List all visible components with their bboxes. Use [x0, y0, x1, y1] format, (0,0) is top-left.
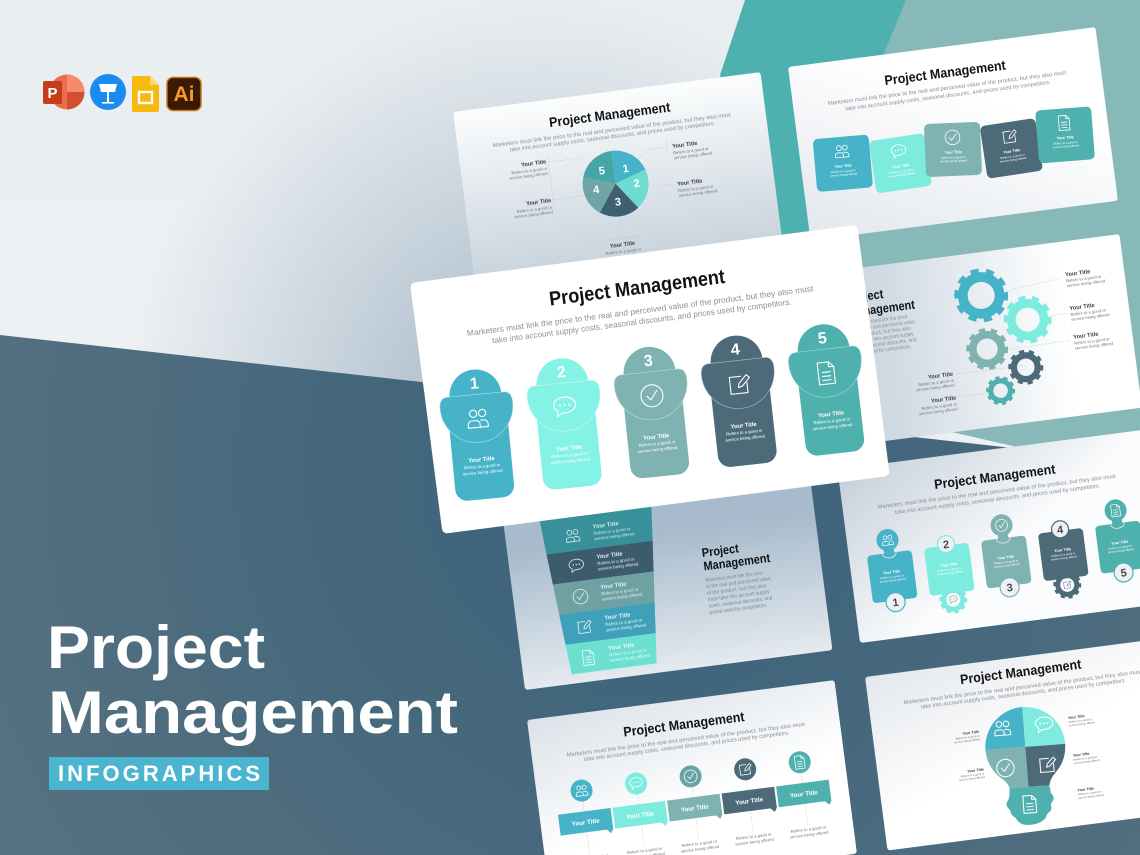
heading: [701, 537, 772, 573]
column 5: 5: [817, 330, 828, 348]
block 5: Your Title: [1057, 135, 1074, 141]
column 1: Your Title: [468, 456, 496, 464]
label: right top: [1068, 713, 1095, 728]
paragraph: must take into account supply: [852, 331, 914, 345]
ribbon 4: [717, 755, 781, 848]
funnel band 2: Refers to a good or: [597, 556, 635, 566]
block 1: [813, 134, 873, 192]
subtitle: Marketers must link the price to the real and perceived value of the product, but they also must: [492, 112, 732, 149]
pie chart: 5: [598, 165, 606, 178]
subtitle: Marketers must link the price to the real and perceived value of the product, but they also must: [466, 284, 814, 338]
paragraph: Marketers must link the price: [705, 570, 763, 584]
card 2: Refers to a good or: [937, 566, 961, 573]
funnel band 3: Refers to a good or: [601, 587, 639, 596]
block 2: service being offered: [888, 171, 916, 179]
label: gear 4: service being offered: [916, 383, 955, 393]
label: gear 5: Refers to a good or: [921, 401, 958, 411]
column 3: service being offered: [638, 445, 678, 454]
label: middle left: [512, 198, 554, 219]
card 1: [864, 526, 919, 614]
block 3: Refers to a good or: [941, 155, 966, 160]
column 4: Refers to a good or: [726, 428, 764, 437]
label: left middle: Your Title: [967, 767, 984, 774]
block 5: Refers to a good or: [1053, 140, 1078, 146]
paragraph: to the real and perceived value: [706, 576, 771, 590]
paragraph: prices used by competitors.: [853, 344, 912, 357]
paragraph: costs, seasonal discounts, and: [853, 337, 917, 351]
gear 3: [966, 328, 1008, 370]
card 3: Your Title: [997, 554, 1015, 561]
subtitle: take into account supply costs, seasonal discounts, and prices used by competitors.: [584, 730, 790, 763]
subtitle: take into account supply costs, seasonal discounts, and prices used by competitors.: [510, 121, 716, 153]
label: right bottom: [1077, 785, 1105, 800]
label: top right: Refers to a good or: [673, 146, 710, 155]
label: gear 2: Your Title: [1069, 303, 1095, 312]
funnel band 2: [547, 541, 657, 585]
column 4: [697, 332, 784, 469]
label: gear 2: Refers to a good or: [1070, 307, 1107, 317]
label: bottom: [603, 240, 644, 261]
ribbon 2: Refers to a good or: [627, 846, 663, 855]
pie chart: 3: [614, 196, 622, 209]
subtitle: Marketers must link the price to the real and perceived value of the product, but they also must: [877, 474, 1117, 511]
paragraph: prices used by competitors.: [709, 603, 768, 616]
bulb diagram: [982, 704, 1071, 828]
label: right bottom: service being offered: [1078, 793, 1105, 800]
funnel band 5: service being offered: [610, 653, 651, 663]
heading: Project Management: [622, 709, 746, 740]
column 2: Your Title: [556, 445, 583, 453]
label: bottom: Your Title: [610, 241, 635, 250]
connector lines: [946, 278, 1076, 397]
gear 2: [1003, 295, 1052, 344]
block 3: [924, 122, 982, 177]
heading: Management: [847, 297, 916, 320]
panel: pie chart slide: [453, 72, 783, 286]
funnel band 1: Your Title: [592, 521, 620, 530]
card 4: 4: [1056, 524, 1065, 537]
label: right middle: Your Title: [1073, 752, 1090, 758]
paragraph: [705, 570, 775, 616]
ribbon 4: service being offered: [735, 837, 775, 847]
block 1: Your Title: [834, 163, 852, 169]
ribbon 3: [663, 762, 727, 855]
block 1: service being offered: [830, 172, 858, 178]
block 2: Your Title: [892, 163, 910, 170]
paragraph: to the real and perceived value: [850, 319, 915, 333]
gear 1: [954, 268, 1008, 323]
label: top left: [507, 159, 549, 181]
column 3: Your Title: [643, 433, 670, 442]
funnel band 4: [559, 602, 659, 645]
label: gear 4: Refers to a good or: [918, 378, 955, 387]
column 1: Refers to a good or: [464, 462, 501, 470]
label: top left: Refers to a good or: [511, 166, 548, 175]
label: gear 5: service being offered: [919, 406, 959, 416]
funnel band 1: [540, 505, 656, 555]
column 1: 1: [469, 375, 480, 393]
connector lines: [583, 773, 811, 855]
panel: light bulb slide: [865, 637, 1140, 851]
paragraph: must take into account supply: [708, 589, 770, 603]
card 5: 5: [1120, 567, 1128, 580]
funnel band 3: Your Title: [600, 582, 628, 591]
label: left middle: Refers to a good or: [960, 771, 985, 778]
label: top left: Your Title: [521, 159, 547, 169]
label: gear 3: Refers to a good or: [1074, 336, 1111, 346]
pie chart: 2: [633, 178, 641, 190]
label: middle left: service being offered: [514, 209, 554, 219]
funnel band 1: Refers to a good or: [593, 526, 632, 536]
label: middle right: service being offered: [678, 188, 718, 198]
paragraph: costs, seasonal discounts, and: [708, 595, 773, 610]
label: gear 5: [917, 395, 959, 416]
label: gear 2: [1069, 301, 1110, 322]
badge: infographics: INFOGRAPHICS: [58, 761, 260, 786]
label: gear 4: Your Title: [928, 372, 954, 381]
panel: gears slide: [812, 234, 1140, 448]
label: gear 5: Your Title: [931, 395, 957, 405]
heading: Project Management: [884, 57, 1007, 88]
card 3: Refers to a good or: [994, 558, 1019, 566]
label: middle right: Your Title: [677, 178, 703, 188]
label: right top: service being offered: [1069, 720, 1095, 728]
pie chart: 1: [622, 163, 630, 176]
funnel band 5: Refers to a good or: [609, 648, 647, 657]
label: gear 1: [1065, 267, 1106, 288]
column 3: [611, 343, 697, 480]
block 4: [980, 118, 1043, 179]
panel: funnel slide: [502, 477, 832, 690]
label: left middle: service being offered: [959, 775, 986, 782]
card 1: service being offered: [880, 577, 906, 584]
funnel band 5: [566, 633, 660, 675]
subtitle: take into account supply costs, seasonal discounts, and prices used by competitors.: [492, 298, 792, 345]
block 2: Refers to a good or: [889, 167, 914, 175]
funnel band 2: service being offered: [598, 561, 639, 572]
ribbon 3: service being offered: [680, 844, 720, 854]
label: right middle: [1073, 751, 1100, 765]
label: left middle: [958, 767, 986, 782]
column 2: 2: [556, 364, 567, 382]
heading: Project: [701, 541, 740, 560]
ribbon 3: Refers to a good or: [681, 838, 718, 848]
label: gear 2: service being offered: [1071, 312, 1110, 322]
card 5: Your Title: [1111, 540, 1129, 546]
card 3: 3: [1006, 582, 1014, 595]
heading: Project Management: [548, 266, 727, 311]
label: gear 3: Your Title: [1073, 332, 1099, 341]
label: middle right: [677, 177, 718, 198]
column 5: Your Title: [818, 410, 845, 419]
ribbon 5: service being offered: [790, 830, 829, 840]
subtitle: Marketers must link the price to the real and perceived value of the product, but they also must: [903, 669, 1140, 706]
column 2: Refers to a good or: [551, 450, 589, 459]
heading: Project: [846, 287, 885, 306]
subtitle: take into account supply costs, seasonal discounts, and prices used by competitors.: [845, 80, 1052, 112]
panel: timeline ribbons slide: [527, 680, 857, 855]
label: top left: service being offered: [509, 171, 549, 181]
heading: Project Management: [959, 657, 1083, 687]
icon: Illustrator: [167, 78, 201, 110]
label: gear 3: service being offered: [1074, 341, 1114, 351]
panel: numbered cards slide: [838, 430, 1140, 643]
label: top right: [672, 139, 713, 160]
ribbon 5: Refers to a good or: [790, 824, 827, 834]
label: left top: Your Title: [962, 730, 979, 736]
badge: infographics: [49, 757, 269, 790]
column 3: 3: [643, 353, 654, 370]
block 1: Refers to a good or: [831, 168, 856, 174]
column 5: Refers to a good or: [813, 416, 851, 425]
column 4: Your Title: [730, 422, 758, 431]
software icons row: [43, 74, 201, 112]
card 1: Refers to a good or: [880, 573, 904, 580]
block 4: service being offered: [1000, 156, 1027, 164]
gear 4: [1008, 350, 1043, 385]
heading: Project Management: [933, 461, 1057, 492]
ribbon 5: [772, 748, 836, 841]
column 5: [784, 320, 872, 458]
column 4: 4: [730, 341, 741, 359]
heading: Management: [703, 551, 772, 573]
background: dark slate shape: [0, 335, 1140, 855]
column 3: Refers to a good or: [638, 439, 676, 448]
card 4: Refers to a good or: [1051, 551, 1076, 558]
card 4: Your Title: [1054, 547, 1072, 553]
funnel band 4: service being offered: [606, 622, 647, 633]
label: left top: service being offered: [954, 737, 981, 745]
card 2: [923, 533, 977, 615]
block 4: Refers to a good or: [1000, 152, 1025, 160]
pie chart: [579, 147, 653, 221]
block 3: Your Title: [944, 150, 962, 155]
ribbon 2: [608, 769, 672, 855]
background: light teal shape: [790, 0, 1140, 450]
block 4: Your Title: [1003, 148, 1021, 155]
card 5: service being offered: [1108, 547, 1134, 554]
label: middle left: Refers to a good or: [516, 204, 553, 214]
funnel band 1: service being offered: [594, 531, 635, 541]
panel: main featured slide: [410, 225, 890, 534]
card 2: Your Title: [940, 562, 957, 568]
icon: Keynote: [90, 74, 126, 110]
label: gear 4: [914, 372, 955, 393]
label: right bottom: Refers to a good or: [1078, 789, 1102, 797]
column 2: service being offered: [550, 456, 591, 465]
icon: Google Slides: [132, 76, 159, 112]
card 2: 2: [942, 539, 950, 551]
funnel band 4: Your Title: [604, 612, 632, 622]
icon: Illustrator: Ai: [174, 83, 194, 106]
paragraph: Marketers must link the price: [849, 314, 908, 328]
label: middle left: Your Title: [526, 198, 552, 207]
label: middle right: Refers to a good or: [678, 184, 714, 193]
label: gear 1: Your Title: [1065, 269, 1091, 278]
label: right top: Your Title: [1068, 714, 1085, 720]
funnel band 3: service being offered: [602, 592, 643, 602]
subtitle: take into account supply costs, seasonal discounts, and prices used by competitors.: [921, 678, 1127, 711]
column 4: service being offered: [725, 433, 766, 443]
ribbon 2: Your Title: [626, 810, 655, 821]
funnel band 3: [553, 571, 658, 615]
ribbon 1: [554, 776, 618, 855]
card 2: service being offered: [937, 569, 963, 577]
card 1: 1: [892, 597, 900, 609]
block 5: service being offered: [1052, 143, 1080, 149]
card 4: service being offered: [1051, 554, 1077, 562]
label: top right: Your Title: [672, 141, 698, 150]
label: right top: Refers to a good or: [1068, 717, 1093, 724]
heading: [846, 283, 916, 320]
subtitle: Marketers must link the price to the real and perceived value of the product, but they also must: [828, 70, 1067, 107]
main title: Project: [47, 614, 265, 681]
panel: tilted blocks slide: [788, 27, 1118, 241]
main title: Management: [48, 679, 458, 746]
paragraph: of the product, but they also: [707, 583, 767, 597]
label: right middle: Refers to a good or: [1073, 755, 1097, 762]
card 3: [978, 511, 1033, 600]
ribbon 1: Your Title: [571, 817, 601, 828]
ribbon 4: Refers to a good or: [736, 831, 773, 841]
icon: PowerPoint: P: [47, 85, 58, 102]
block 2: [869, 133, 932, 194]
label: gear 1: service being offered: [1066, 278, 1106, 288]
block 3: service being offered: [940, 158, 967, 163]
funnel band 5: Your Title: [608, 643, 636, 652]
ribbon 4: Your Title: [735, 796, 764, 807]
subtitle: Marketers must link the price to the real and perceived value of the product, but they also must: [567, 722, 806, 759]
card 3: service being offered: [994, 562, 1020, 569]
icon: PowerPoint: [43, 74, 84, 110]
card 4: [1037, 518, 1091, 600]
label: gear 3: [1073, 330, 1114, 351]
column 1: [437, 366, 522, 503]
card 5: Refers to a good or: [1108, 544, 1133, 551]
column 2: [524, 355, 609, 491]
pie chart: 4: [592, 184, 601, 197]
background: teal shape: [720, 0, 906, 242]
ribbon 3: Your Title: [680, 803, 710, 814]
label: bottom: service being offered: [604, 251, 644, 261]
main title: [47, 614, 458, 746]
heading: Project Management: [548, 99, 672, 130]
ribbon 5: Your Title: [790, 789, 819, 800]
label: gear 1: Refers to a good or: [1066, 274, 1102, 283]
funnel band 4: Refers to a good or: [605, 617, 643, 627]
label: left top: [953, 730, 981, 745]
block 5: [1035, 106, 1095, 163]
label: left top: Refers to a good or: [956, 734, 980, 741]
column 5: service being offered: [812, 422, 853, 432]
card 1: Your Title: [883, 569, 900, 575]
column 1: service being offered: [463, 468, 503, 477]
connector lines: [547, 140, 678, 246]
paragraph: [849, 313, 919, 357]
label: top right: service being offered: [673, 150, 713, 160]
label: right middle: service being offered: [1074, 758, 1100, 765]
gear 5: [986, 376, 1015, 405]
paragraph: of the product, but they also: [851, 326, 911, 339]
label: right bottom: Your Title: [1077, 786, 1094, 793]
label: bottom: Refers to a good or: [605, 246, 642, 256]
card 5: [1092, 497, 1140, 585]
subtitle: take into account supply costs, seasonal discounts, and prices used by competitors.: [895, 483, 1101, 516]
funnel band 2: Your Title: [596, 551, 624, 561]
background: soft shade: [100, 0, 970, 840]
